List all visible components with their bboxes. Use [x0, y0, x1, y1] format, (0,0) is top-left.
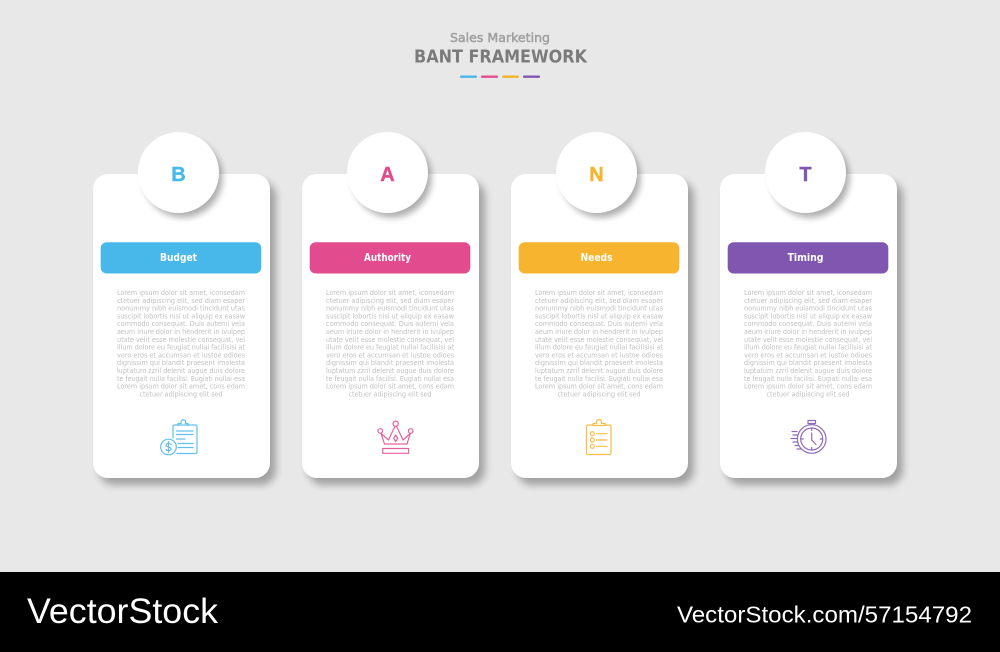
text block: te feugait nulla facilisi. Eugiati nullai esa — [535, 375, 663, 383]
title: Sales Marketing — [450, 30, 550, 45]
text block: Lorem ipsum dolor sit amet, cons edam — [117, 383, 245, 391]
panel: budget — [93, 132, 276, 485]
text block: luptatum zzril delenit augue duis dolore — [744, 367, 872, 375]
text block: dignissim qui blandit praesent imolesta — [326, 359, 454, 367]
footer: watermark bar — [0, 572, 1000, 652]
text block: Lorem ipsum dolor sit amet, cons edam — [744, 383, 872, 391]
text block: dignissim qui blandit praesent imolesta — [535, 359, 663, 367]
text block: ctetuer adipiscing elit, sed diam esaper — [744, 297, 872, 305]
text block: illum dolore eu feugiat nullai facilisisi at — [535, 344, 663, 352]
text block: aeum iriure dolor in hendrerit in ivulpep — [117, 328, 245, 336]
title: BANT FRAMEWORK — [414, 48, 588, 68]
panel: timing: T — [799, 164, 812, 186]
text block: suscipit lobortis nisl ut aliquip ex easaw — [117, 312, 246, 320]
panel: needs: Needs — [580, 252, 612, 264]
text block: suscipit lobortis nisl ut aliquip ex easaw — [744, 312, 873, 320]
text block: illum dolore eu feugiat nullai facilisisi at — [744, 344, 872, 352]
text block: aeum iriure dolor in hendrerit in ivulpep — [326, 328, 454, 336]
panel: timing — [720, 132, 903, 485]
text block: Lorem ipsum dolor sit amet, cons edam — [535, 383, 663, 391]
text block: luptatum zzril delenit augue duis dolore — [117, 367, 245, 375]
footer: watermark bar: VectorStock.com/57154792 — [677, 602, 972, 628]
text block: ctetuer adipiscing elit sed — [348, 390, 432, 398]
text block: vero eros et accumsan et iustoe odioes — [744, 351, 872, 359]
text block: vero eros et accumsan et iustoe odioes — [117, 351, 245, 359]
text block: Lorem ipsum dolor sit amet, iconsedam — [744, 289, 872, 297]
text block: te feugait nulla facilisi. Eugiati nullai esa — [744, 375, 872, 383]
icon: checklist clipboard — [586, 420, 611, 454]
text block: ctetuer adipiscing elit sed — [140, 390, 222, 398]
text block: Lorem ipsum dolor sit amet, iconsedam — [326, 289, 454, 297]
text block: dignissim qui blandit praesent imolesta — [117, 359, 245, 367]
text block: vero eros et accumsan et iustoe odioes — [326, 351, 454, 359]
text block: ctetuer adipiscing elit, sed diam esaper — [535, 297, 663, 305]
panel: needs — [511, 132, 694, 485]
text block: illum dolore eu feugiat nullai facilisisi at — [117, 344, 245, 352]
text block: nonummy nibh euismodi tincidunt utas — [117, 305, 245, 313]
text block: ctetuer adipiscing elit, sed diam esaper — [326, 297, 454, 305]
text block: ctetuer adipiscing elit, sed diam esaper — [117, 297, 245, 305]
text block: nonummy nibh euismodi tincidunt utas — [744, 305, 872, 313]
panel: budget: Budget — [160, 252, 197, 264]
text block: Lorem ipsum dolor sit amet, iconsedam — [117, 289, 245, 297]
panel: authority: A — [380, 164, 395, 186]
text block: utate velit esse molestie consequat, vel — [535, 336, 663, 344]
text block — [744, 289, 873, 398]
icon: crown — [378, 421, 413, 453]
panel: authority — [302, 132, 485, 485]
text block: te feugait nulla facilisi. Eugiati nullai esa — [117, 375, 245, 383]
panel: timing: Timing — [788, 252, 824, 264]
text block: commodo consequat. Duis autemi vela — [326, 320, 454, 328]
footer: watermark bar: VectorStock — [27, 592, 219, 631]
text block: utate velit esse molestie consequat, vel — [744, 336, 872, 344]
text block: Lorem ipsum dolor sit amet, cons edam — [326, 383, 454, 391]
text block: luptatum zzril delenit augue duis dolore — [326, 367, 454, 375]
panel: needs: N — [589, 164, 604, 186]
text block: utate velit esse molestie consequat, vel — [117, 336, 245, 344]
text block: commodo consequat. Duis autemi vela — [744, 320, 872, 328]
text block: commodo consequat. Duis autemi vela — [535, 320, 663, 328]
text block: illum dolore eu feugiat nullai facilisisi at — [326, 344, 454, 352]
text block: nonummy nibh euismodi tincidunt utas — [535, 305, 663, 313]
text block: commodo consequat. Duis autemi vela — [117, 320, 245, 328]
text block: nonummy nibh euismodi tincidunt utas — [326, 305, 454, 313]
text block: dignissim qui blandit praesent imolesta — [744, 359, 872, 367]
text block — [117, 289, 246, 398]
panel: authority: Authority — [364, 252, 411, 264]
text block — [535, 289, 664, 398]
text block: te feugait nulla facilisi. Eugiati nullai esa — [326, 375, 454, 383]
icon: stopwatch — [791, 420, 826, 453]
panel: budget: B — [171, 164, 186, 186]
text block: luptatum zzril delenit augue duis dolore — [535, 367, 663, 375]
text block: vero eros et accumsan et iustoe odioes — [535, 351, 663, 359]
text block: suscipit lobortis nisl ut aliquip ex easaw — [535, 312, 664, 320]
text block: aeum iriure dolor in hendrerit in ivulpep — [744, 328, 872, 336]
text block — [326, 289, 455, 398]
text block: ctetuer adipiscing elit sed — [558, 390, 640, 398]
text block: ctetuer adipiscing elit sed — [766, 390, 850, 398]
title — [414, 30, 588, 78]
text block: suscipit lobortis nisl ut aliquip ex easaw — [326, 312, 455, 320]
text block: aeum iriure dolor in hendrerit in ivulpep — [535, 328, 663, 336]
text block: utate velit esse molestie consequat, vel — [326, 336, 454, 344]
icon: clipboard with dollar coin — [161, 420, 197, 455]
text block: Lorem ipsum dolor sit amet, iconsedam — [535, 289, 663, 297]
